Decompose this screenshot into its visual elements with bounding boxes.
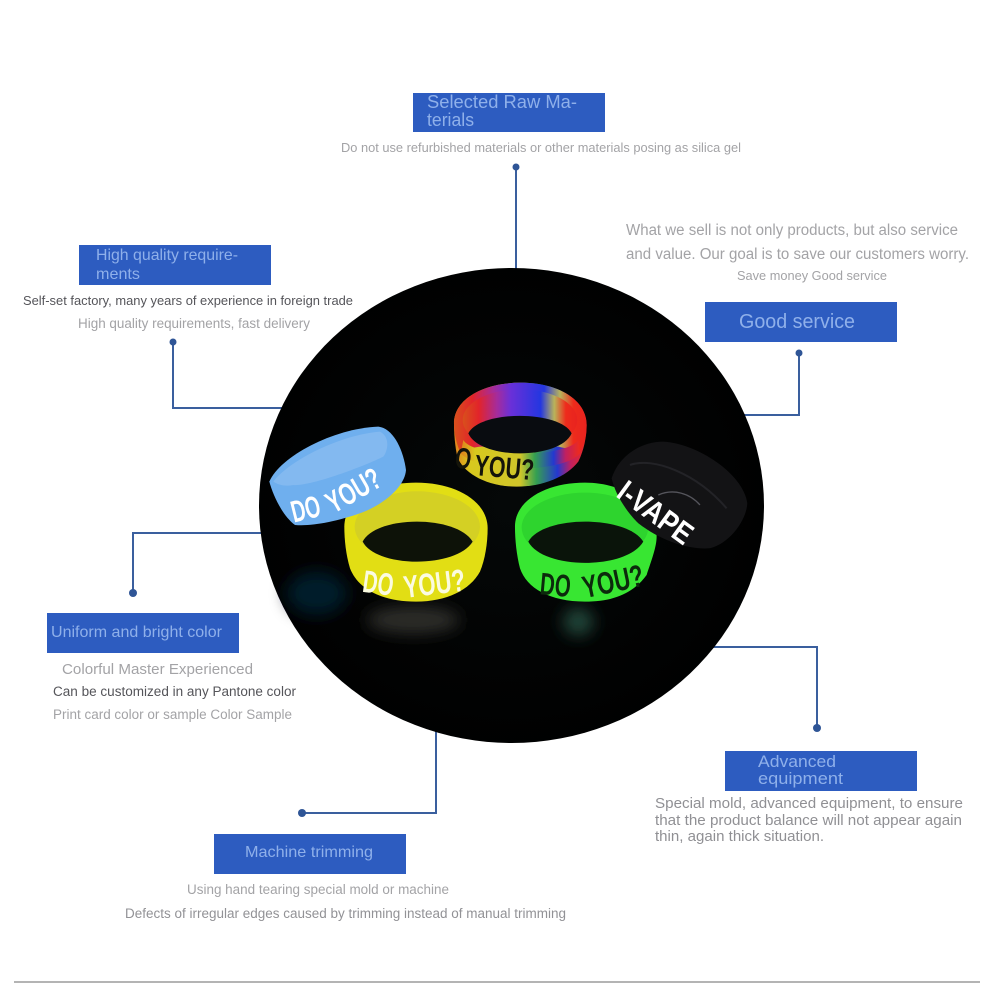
- panel: high quality requirements: [23, 245, 353, 331]
- heading box: [413, 93, 605, 132]
- panel: advanced equipment: [655, 751, 963, 845]
- reflections: [287, 572, 593, 636]
- ring text: [287, 461, 387, 529]
- product photo: silicone rings on black circle: [259, 268, 764, 743]
- heading text: Good service: [739, 311, 855, 333]
- ring text: [539, 558, 647, 605]
- ring text: [453, 442, 535, 487]
- description: Special mold, advanced equipment, to ensure: [655, 795, 963, 812]
- heading text: Advanced: [758, 752, 836, 771]
- panel: machine trimming: [125, 834, 566, 921]
- black ring: [611, 442, 747, 552]
- heading box: [705, 302, 897, 342]
- ring text: YOU?: [473, 449, 535, 487]
- description dark line: Self-set factory, many years of experience in foreign trade: [23, 294, 353, 308]
- description: thin, again thick situation.: [655, 828, 824, 845]
- heading text: Uniform and bright color: [51, 624, 223, 641]
- connector: machine trimming: [298, 730, 436, 817]
- line 1: Using hand tearing special mold or machine: [187, 882, 449, 897]
- panel: uniform and bright color: [47, 613, 296, 722]
- heading text: equipment: [758, 769, 843, 788]
- ring text: DO: [287, 489, 324, 529]
- heading box: [79, 245, 271, 285]
- panel: selected raw materials: [341, 92, 741, 155]
- description: that the product balance will not appear again: [655, 812, 962, 829]
- yellow ring: [344, 483, 488, 605]
- intro text: What we sell is not only products, but also service: [626, 222, 958, 239]
- connector: high quality requirements: [170, 338, 285, 408]
- subline: Save money Good service: [737, 269, 887, 283]
- line 1: Colorful Master Experienced: [62, 661, 253, 678]
- description light line: High quality requirements, fast delivery: [78, 316, 310, 331]
- heading text: Selected Raw Ma-: [427, 92, 577, 112]
- black circle background: [259, 268, 764, 743]
- heading text: terials: [427, 110, 474, 130]
- heading box: [214, 834, 406, 874]
- rainbow ring: [453, 383, 587, 487]
- panel: good service: [626, 222, 969, 342]
- line 2: Defects of irregular edges caused by trimming instead of manual trimming: [125, 906, 566, 921]
- heading box: [47, 613, 239, 653]
- heading text: High quality require-: [96, 247, 238, 264]
- connector: advanced equipment: [710, 647, 821, 732]
- connector: uniform and bright color: [129, 533, 265, 597]
- description: Do not use refurbished materials or other materials posing as silica gel: [341, 141, 741, 155]
- heading text: Machine trimming: [245, 844, 373, 861]
- heading box: [725, 751, 917, 791]
- line 3: Print card color or sample Color Sample: [53, 707, 292, 722]
- ring text: O: [453, 442, 473, 476]
- ring text: YOU?: [579, 558, 647, 605]
- blue ring: [269, 427, 406, 529]
- intro text: and value. Our goal is to save our customers worry.: [626, 246, 969, 263]
- ring text: DO: [539, 566, 572, 604]
- ring text: [361, 563, 467, 605]
- ring text: YOU?: [402, 563, 467, 605]
- connector: selected raw materials: [512, 164, 520, 270]
- line 2: Can be customized in any Pantone color: [53, 684, 296, 699]
- connector: good service: [740, 350, 802, 415]
- green ring: [515, 483, 657, 605]
- ring text: YOU?: [320, 461, 387, 520]
- heading text: ments: [96, 266, 140, 283]
- ring text: I-VAPE: [611, 474, 700, 552]
- ring text: DO: [361, 564, 396, 603]
